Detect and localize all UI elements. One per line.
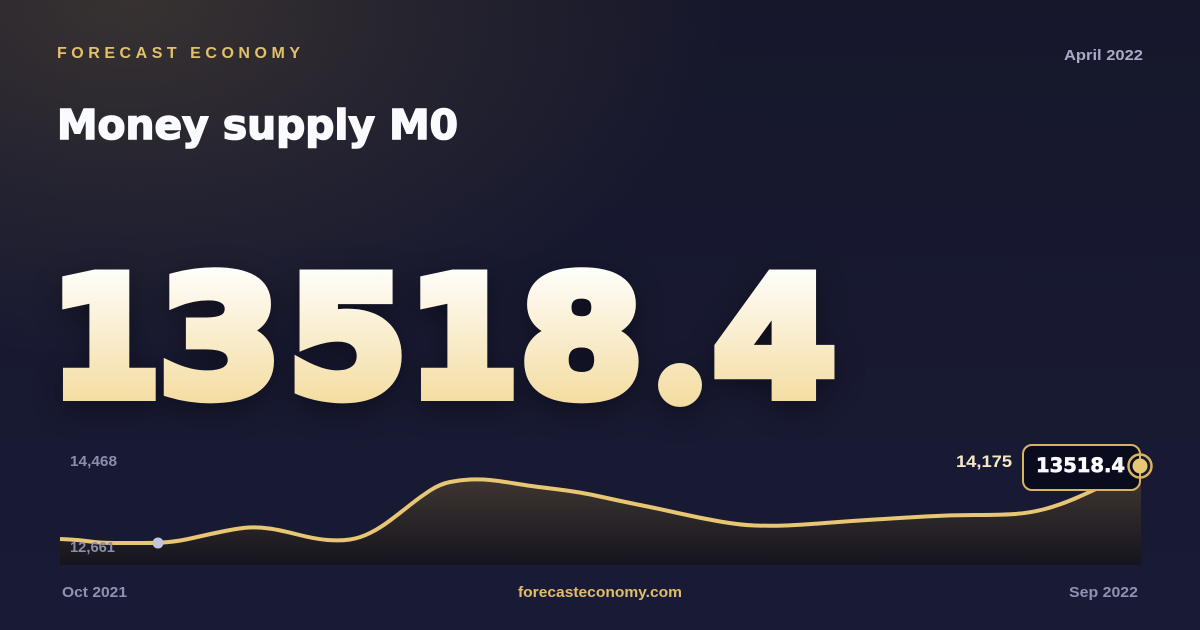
- start marker: [152, 538, 164, 548]
- big value: 1: [50, 244, 161, 435]
- big value: .: [661, 305, 699, 422]
- current value marker: [1128, 454, 1152, 478]
- axis end date: Sep 2022: [1069, 584, 1138, 601]
- axis max label: 14,468: [70, 454, 117, 470]
- big value: 1: [408, 244, 519, 435]
- peak value label: 14,175: [956, 452, 1012, 471]
- chart: money supply area and line: [60, 466, 1141, 565]
- big value: 4: [713, 244, 836, 434]
- big value: [50, 243, 836, 435]
- date label: April 2022: [1064, 47, 1143, 64]
- chart line: [60, 479, 1100, 543]
- callout: current value: 13518.4: [1036, 454, 1125, 477]
- big value: 3: [158, 244, 282, 434]
- title: Money supply M0: [57, 101, 458, 149]
- website: forecasteconomy.com: [518, 584, 682, 601]
- big value: 8: [520, 244, 643, 434]
- brand label: FORECAST ECONOMY: [57, 45, 300, 62]
- axis min label: 12,661: [70, 540, 115, 556]
- big value: 5: [288, 243, 407, 434]
- axis start date: Oct 2021: [62, 584, 127, 601]
- callout: current value: [1023, 445, 1140, 490]
- chart area fill: [60, 466, 1141, 565]
